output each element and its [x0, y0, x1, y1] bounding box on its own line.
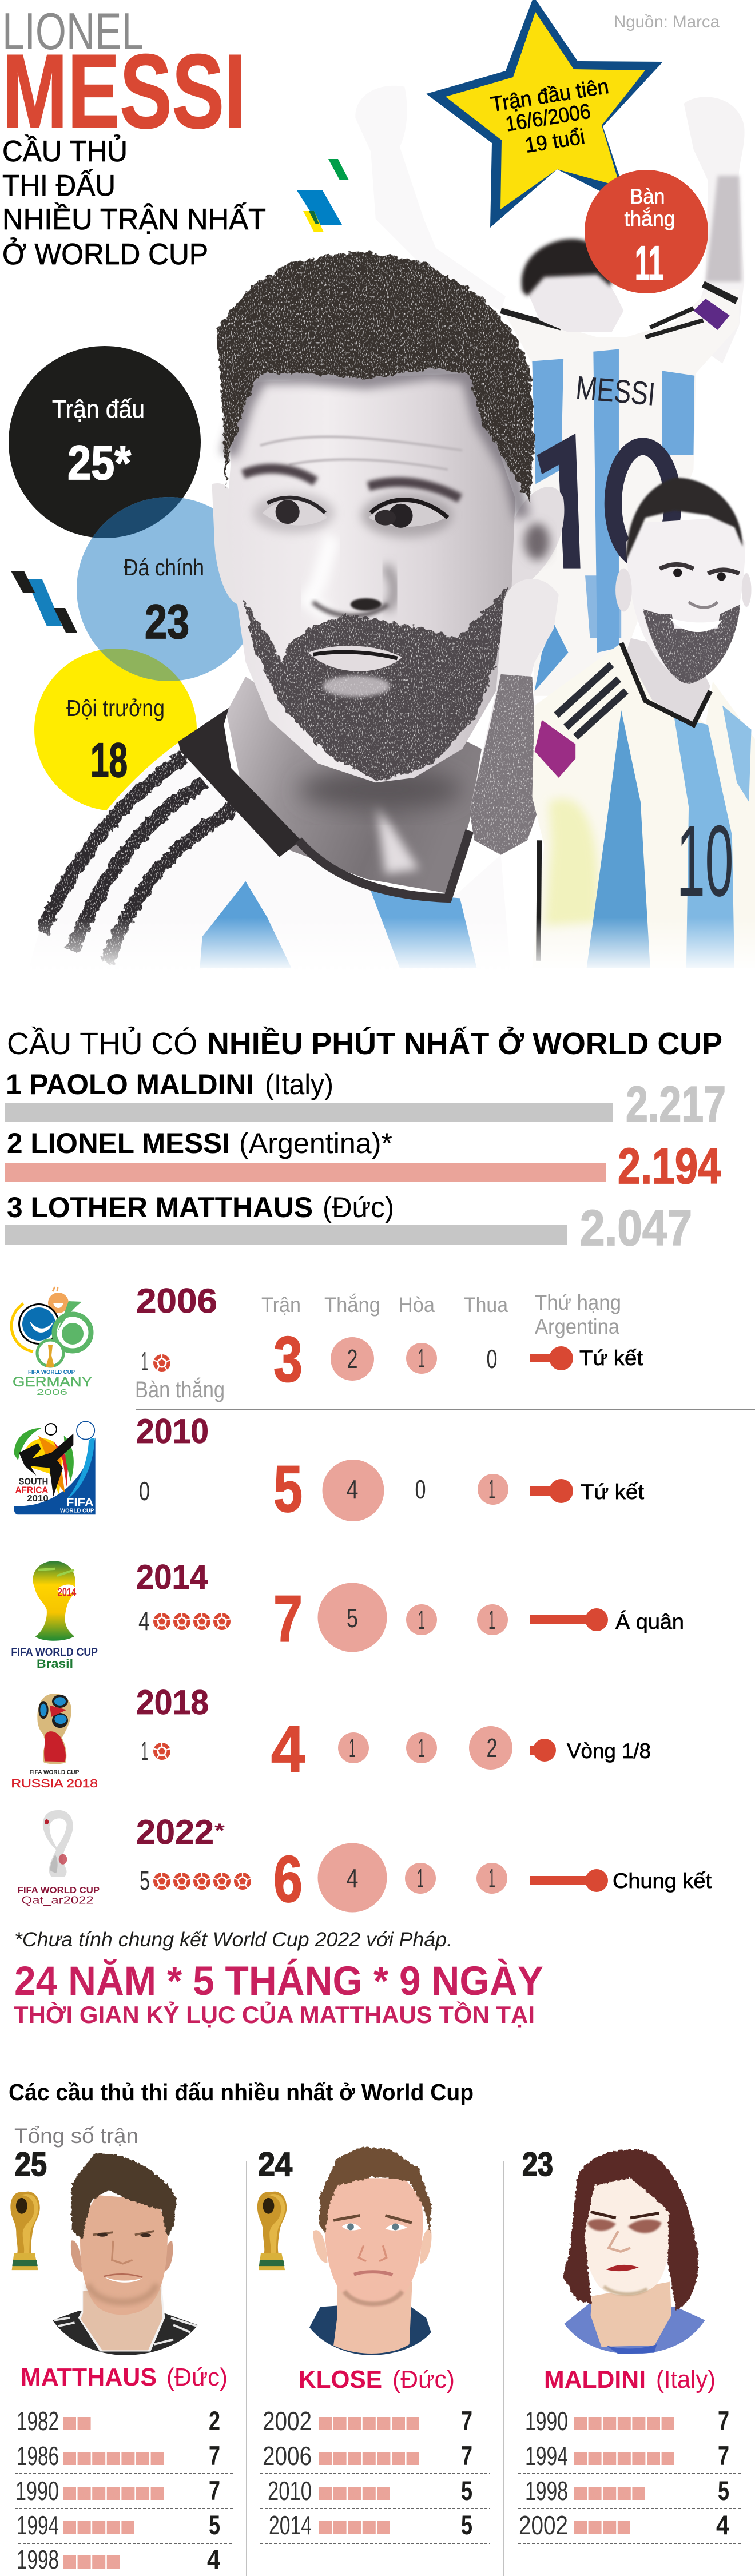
column headers: Bàn thắng — [135, 1377, 225, 1402]
neck and collar — [626, 638, 710, 725]
title — [2, 3, 266, 271]
bottom fade — [0, 917, 755, 973]
tournament rows: 1990 — [525, 2406, 568, 2436]
goals — [141, 1736, 170, 1766]
logo: Russia 2018 — [11, 1694, 98, 1790]
record duration headline — [14, 1959, 543, 2028]
portrait: Klose — [309, 2147, 432, 2355]
stats: 1 — [349, 1733, 356, 1763]
tournament rows: 1998 — [17, 2545, 59, 2574]
tournament rows — [15, 2406, 220, 2574]
tournament rows: 5 — [209, 2510, 220, 2540]
tournament rows: 5 — [461, 2475, 472, 2506]
raised arm with tattoos — [470, 579, 559, 855]
logo: Germany 2006: FIFA WORLD CUP — [28, 1369, 75, 1376]
stats: 1 — [488, 1474, 495, 1504]
logo: Brasil 2014: FIFA WORLD CUP — [11, 1646, 98, 1658]
row: Messi: (Argentina)* — [239, 1127, 392, 1159]
row separators — [136, 1409, 755, 1807]
star text: 19 tuổi — [523, 125, 586, 157]
stat: starts: Đá chính — [124, 554, 204, 581]
logo: Brasil 2014: 2014 — [58, 1585, 77, 1599]
mouth — [308, 646, 402, 697]
tournament rows: 2002 — [263, 2406, 312, 2436]
tournament rows: 2002 — [519, 2510, 568, 2540]
jersey shoulder stripes — [42, 756, 233, 963]
stat: matches — [52, 395, 145, 490]
nose — [308, 537, 395, 616]
ranking marker: Tứ kết — [579, 1346, 643, 1370]
eyes — [253, 492, 452, 538]
star text: Trận đầu tiên — [489, 74, 610, 116]
tournament rows: 2006 — [263, 2441, 312, 2471]
goals: 0 — [139, 1476, 150, 1506]
row: Maldini: 1 PAOLO MALDINI — [6, 1068, 254, 1100]
tournament rows: 4 — [207, 2544, 220, 2574]
ranking marker — [530, 1739, 651, 1763]
logo: Qatar 2022 — [18, 1810, 100, 1906]
tournament rows: 7 — [718, 2406, 729, 2436]
name — [544, 2366, 716, 2394]
tournament rows: 1990 — [15, 2476, 59, 2506]
front figure — [470, 478, 755, 968]
tournament rows: 2 — [209, 2406, 220, 2436]
goals: 1 — [141, 1736, 148, 1766]
eyebrows — [243, 468, 460, 499]
record duration headline: THỜI GIAN KỶ LỤC CỦA MATTHAUS TỒN TẠI — [14, 2001, 535, 2028]
tournament rows: 7 — [718, 2440, 729, 2471]
column headers: Thắng — [324, 1293, 380, 1317]
label: total matches: Tổng số trận — [14, 2124, 138, 2148]
dashed separators — [260, 2438, 490, 2544]
portrait: Maldini — [563, 2149, 705, 2354]
hairline shading — [229, 371, 523, 518]
stat circles behind photo — [9, 346, 261, 811]
tournament rows: 2010 — [268, 2476, 312, 2506]
stat: matches: 25* — [67, 436, 131, 490]
face — [227, 373, 515, 782]
hero photo collage of Messi — [0, 86, 755, 973]
column headers: Thua — [464, 1293, 508, 1317]
callout: goals: thắng — [625, 207, 675, 230]
stats — [273, 1843, 507, 1916]
row: Maldini: 2.217 — [626, 1076, 726, 1132]
callout: goals: 11 — [635, 236, 663, 290]
goals: 1 — [141, 1346, 148, 1376]
logo: South Africa 2010: FIFA — [66, 1496, 94, 1509]
logo: South Africa 2010: WORLD CUP — [60, 1508, 94, 1514]
panel: World Cup results table — [7, 1282, 755, 1916]
stat: captain — [66, 695, 165, 787]
star text: 16/6/2006 — [504, 100, 592, 136]
callout: goals: Bàn — [630, 185, 665, 208]
year: 2014 — [136, 1558, 208, 1596]
stats: 5 — [347, 1603, 358, 1633]
row: Matthaus: (Đức) — [323, 1191, 394, 1223]
logo: South Africa 2010: AFRICA — [15, 1486, 48, 1496]
logo: Brasil 2014 — [11, 1561, 98, 1671]
tournament rows: 1994 — [525, 2441, 568, 2471]
tournament rows: 5 — [461, 2510, 472, 2540]
stat: captain: Đội trưởng — [66, 695, 165, 721]
stats — [271, 1712, 512, 1786]
collar — [178, 708, 301, 857]
logo: South Africa 2010 — [14, 1421, 96, 1514]
record duration headline: 24 NĂM * 5 THÁNG * 9 NGÀY — [14, 1959, 543, 2004]
column headers: Hòa — [399, 1293, 435, 1317]
goals: 4 — [138, 1606, 150, 1636]
title: Lionel: LIONEL — [2, 3, 144, 61]
stats: 0 — [486, 1344, 498, 1374]
column headers: Argentina — [535, 1315, 619, 1338]
star shape — [426, 0, 663, 228]
panel heading: most World Cup matches: Các cầu thủ thi đấu nhiều nhất ở World Cup — [9, 2079, 474, 2105]
row: Messi — [5, 1127, 721, 1194]
logo: Qatar 2022: FIFA WORLD CUP — [18, 1885, 100, 1895]
stats: 1 — [418, 1733, 425, 1763]
ranking marker: Vòng 1/8 — [567, 1739, 651, 1763]
star callout: first match — [426, 0, 663, 228]
stat: starts — [124, 554, 204, 649]
tournament rows: 7 — [461, 2406, 472, 2436]
row: 2006 — [7, 1282, 643, 1397]
icon: trophy — [257, 2192, 287, 2270]
tournament rows: 1986 — [17, 2441, 59, 2471]
logo: Germany 2006 — [7, 1287, 92, 1397]
row: Matthaus: 2.047 — [580, 1199, 692, 1256]
tournament rows: 1998 — [525, 2476, 568, 2506]
name: (Italy) — [656, 2366, 716, 2394]
tournament rows: 2014 — [269, 2510, 312, 2540]
tournament rows: 4 — [716, 2510, 729, 2540]
name — [21, 2363, 228, 2391]
heading: CẦU THỦ CÓ — [7, 1027, 197, 1061]
panel: most minutes at World Cup — [5, 1027, 726, 1256]
name: (Đức) — [166, 2363, 228, 2391]
ears — [212, 483, 243, 605]
tournament rows: 1994 — [17, 2510, 59, 2540]
jersey name on back figure: MESSI — [574, 369, 657, 413]
tournament rows: 1982 — [17, 2406, 59, 2436]
ranking marker — [530, 1869, 712, 1893]
year: 2006 — [136, 1282, 217, 1320]
ranking marker — [530, 1479, 645, 1504]
callout: goals — [585, 170, 708, 293]
portrait: Matthaus — [53, 2153, 198, 2355]
column headers — [135, 1291, 621, 1402]
subtitle: THI ĐẤU — [2, 169, 116, 202]
tournament rows: 7 — [461, 2440, 472, 2471]
column headers: Trận — [261, 1293, 301, 1317]
title: Messi: MESSI — [2, 32, 246, 150]
row: Matthaus — [5, 1191, 692, 1256]
stats: 1 — [488, 1863, 495, 1893]
name: KLOSE — [299, 2366, 382, 2394]
decorative slashes: black and blue — [11, 571, 77, 633]
row: Matthaus: 3 LOTHER MATTHAUS — [7, 1191, 313, 1223]
panel: Matthaus — [10, 2146, 233, 2574]
year: * — [214, 1820, 225, 1842]
goals — [141, 1346, 170, 1376]
stats: 5 — [273, 1453, 303, 1526]
subtitle: Ở WORLD CUP — [2, 237, 208, 271]
row: Maldini — [5, 1068, 726, 1132]
tournament rows: 7 — [209, 2475, 220, 2506]
stats: 1 — [417, 1863, 424, 1893]
column dividers — [247, 2161, 504, 2576]
logo: Germany 2006: GERMANY — [13, 1374, 92, 1390]
subtitle — [2, 134, 266, 271]
tournament rows — [263, 2406, 472, 2540]
ranking marker: Á quân — [615, 1610, 684, 1633]
ranking marker: Chung kết — [613, 1869, 712, 1893]
logo: Brasil 2014: Brasil — [37, 1657, 73, 1671]
heading: NHIỀU PHÚT NHẤT Ở WORLD CUP — [207, 1027, 722, 1061]
source note: Nguồn: Marca — [614, 13, 720, 31]
stats: 7 — [273, 1583, 303, 1656]
shoulder stripes — [557, 665, 626, 737]
tournament patch — [535, 720, 575, 778]
logo: Qatar 2022: Qat_ar2022 — [22, 1894, 94, 1906]
star text — [489, 74, 610, 157]
stats: 1 — [418, 1605, 425, 1635]
subtitle: CẦU THỦ — [2, 134, 128, 168]
stats: 4 — [271, 1712, 305, 1786]
logo: Germany 2006: 2006 — [37, 1388, 67, 1397]
stat: captain: 18 — [90, 733, 128, 787]
name — [299, 2366, 455, 2394]
logo: South Africa 2010: 2010 — [27, 1494, 49, 1504]
column headers: Thứ hạng — [535, 1291, 621, 1314]
decorative slashes: green, blue, yellow — [297, 159, 349, 232]
row: 2018 — [11, 1683, 651, 1790]
stats: 1 — [488, 1605, 495, 1635]
total: 24 — [258, 2146, 292, 2183]
row: Messi: 2.194 — [618, 1138, 721, 1194]
row: 2010 — [14, 1412, 645, 1526]
stats: 2 — [486, 1733, 498, 1763]
goals — [140, 1866, 251, 1895]
name: MALDINI — [544, 2366, 646, 2394]
jersey — [29, 740, 511, 971]
stats — [273, 1323, 498, 1395]
icon: trophy — [10, 2192, 40, 2270]
panel: Maldini — [518, 2146, 741, 2544]
stat: starts: 23 — [145, 595, 189, 649]
logo: Russia 2018: FIFA WORLD CUP — [30, 1769, 80, 1776]
ranking marker: Tứ kết — [581, 1480, 645, 1504]
row: Messi: 2 LIONEL MESSI — [7, 1127, 230, 1159]
stats — [273, 1583, 508, 1656]
logo: South Africa 2010: SOUTH — [19, 1477, 48, 1487]
stats: 4 — [347, 1863, 358, 1893]
total: 23 — [522, 2146, 553, 2183]
panel: Klose — [257, 2146, 490, 2544]
stat: matches: Trận đấu — [52, 395, 145, 423]
row: 2014 — [11, 1558, 684, 1671]
stats: 3 — [273, 1323, 303, 1395]
tournament rows — [519, 2406, 729, 2540]
tournament rows: 7 — [209, 2440, 220, 2471]
dashed separators — [15, 2438, 233, 2544]
main portrait — [29, 251, 564, 971]
stats: 2 — [347, 1344, 358, 1374]
row: Maldini: (Italy) — [265, 1068, 333, 1100]
footnote: *Chưa tính chung kết World Cup 2022 với Pháp. — [14, 1929, 452, 1951]
stats: 0 — [415, 1474, 426, 1504]
goals: 5 — [140, 1866, 150, 1895]
hair — [217, 251, 535, 503]
stats — [273, 1453, 508, 1526]
stats: 4 — [347, 1474, 358, 1504]
head — [626, 518, 745, 684]
tournament rows: 5 — [718, 2475, 729, 2506]
total: 25 — [15, 2146, 47, 2183]
year: 2018 — [136, 1683, 209, 1722]
name: (Đức) — [392, 2366, 455, 2394]
row: 2022 — [18, 1810, 712, 1916]
neck — [227, 677, 482, 893]
name: MATTHAUS — [21, 2363, 157, 2391]
jersey — [532, 643, 755, 968]
logo: Russia 2018: RUSSIA 2018 — [11, 1777, 98, 1790]
back figure with raised arms — [355, 86, 745, 696]
year: 2022 — [136, 1813, 214, 1851]
dashed separators — [518, 2438, 741, 2544]
stats: 1 — [418, 1343, 425, 1373]
ranking marker — [530, 1608, 684, 1633]
subtitle: NHIỀU TRẬN NHẤT — [2, 202, 266, 236]
year: 2010 — [136, 1412, 209, 1450]
beard — [243, 585, 508, 782]
goals — [138, 1606, 231, 1636]
ranking marker — [530, 1346, 643, 1370]
stats: 6 — [273, 1843, 303, 1916]
